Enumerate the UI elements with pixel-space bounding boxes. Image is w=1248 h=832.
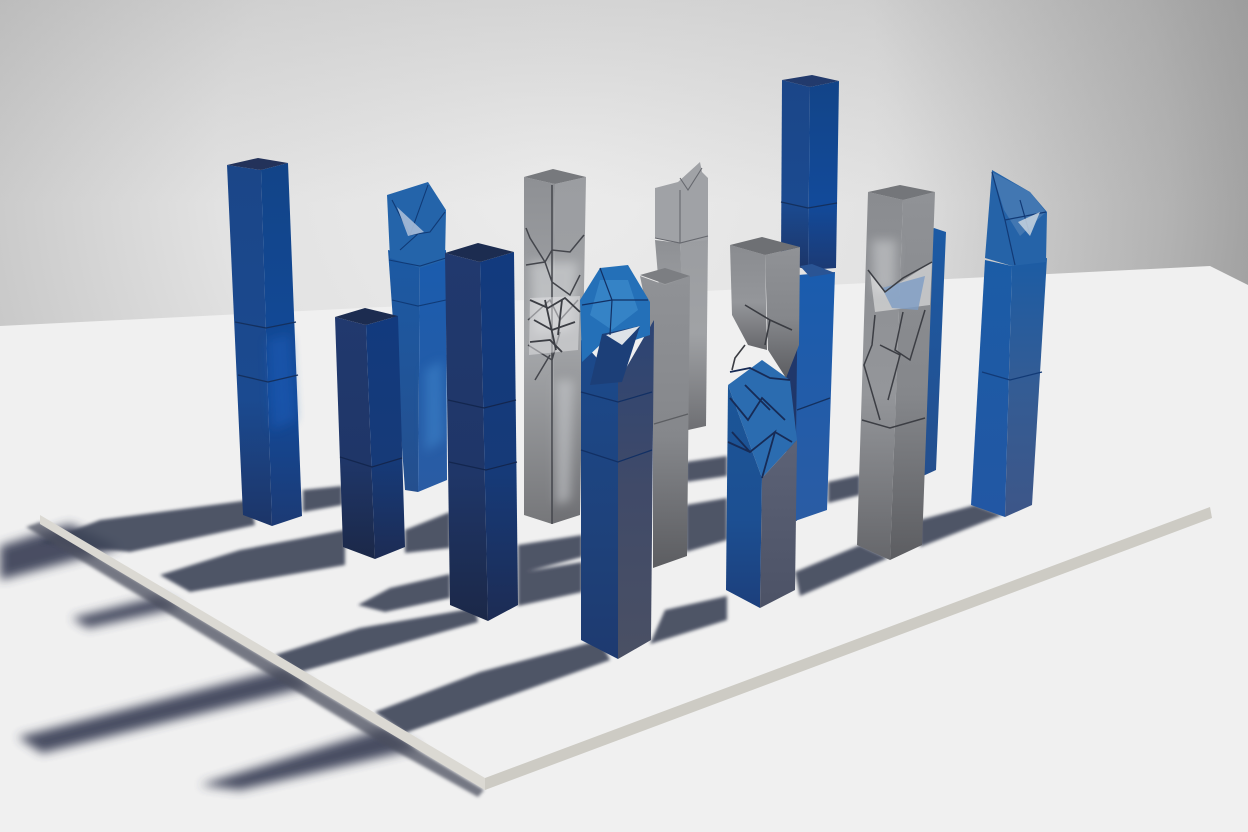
table surface [0,266,1248,832]
column: tall rear blue [781,75,839,270]
column: far-left blue [227,158,302,526]
column: gray cracked right [857,185,935,560]
column: blue middle right [785,264,835,521]
column: gray behind front blue [640,268,690,568]
column: blue with crystal top, front [580,265,654,659]
back wall [0,0,1248,340]
shadows cast on the platform [40,456,1002,733]
column: far-right blue broken [971,170,1047,517]
soft shadows on the table beyond the platform [0,524,420,790]
platform edge and under-shadow [26,507,1212,797]
column: rear right blue sliver [923,228,946,476]
column: short blue left [335,308,405,559]
column: gray broken rear [655,162,708,430]
column: center blue [445,243,518,621]
column: gray cracked rear [524,169,586,524]
column: broken blue behind left [387,182,447,492]
column: gray-to-blue shattered front right [726,237,800,608]
